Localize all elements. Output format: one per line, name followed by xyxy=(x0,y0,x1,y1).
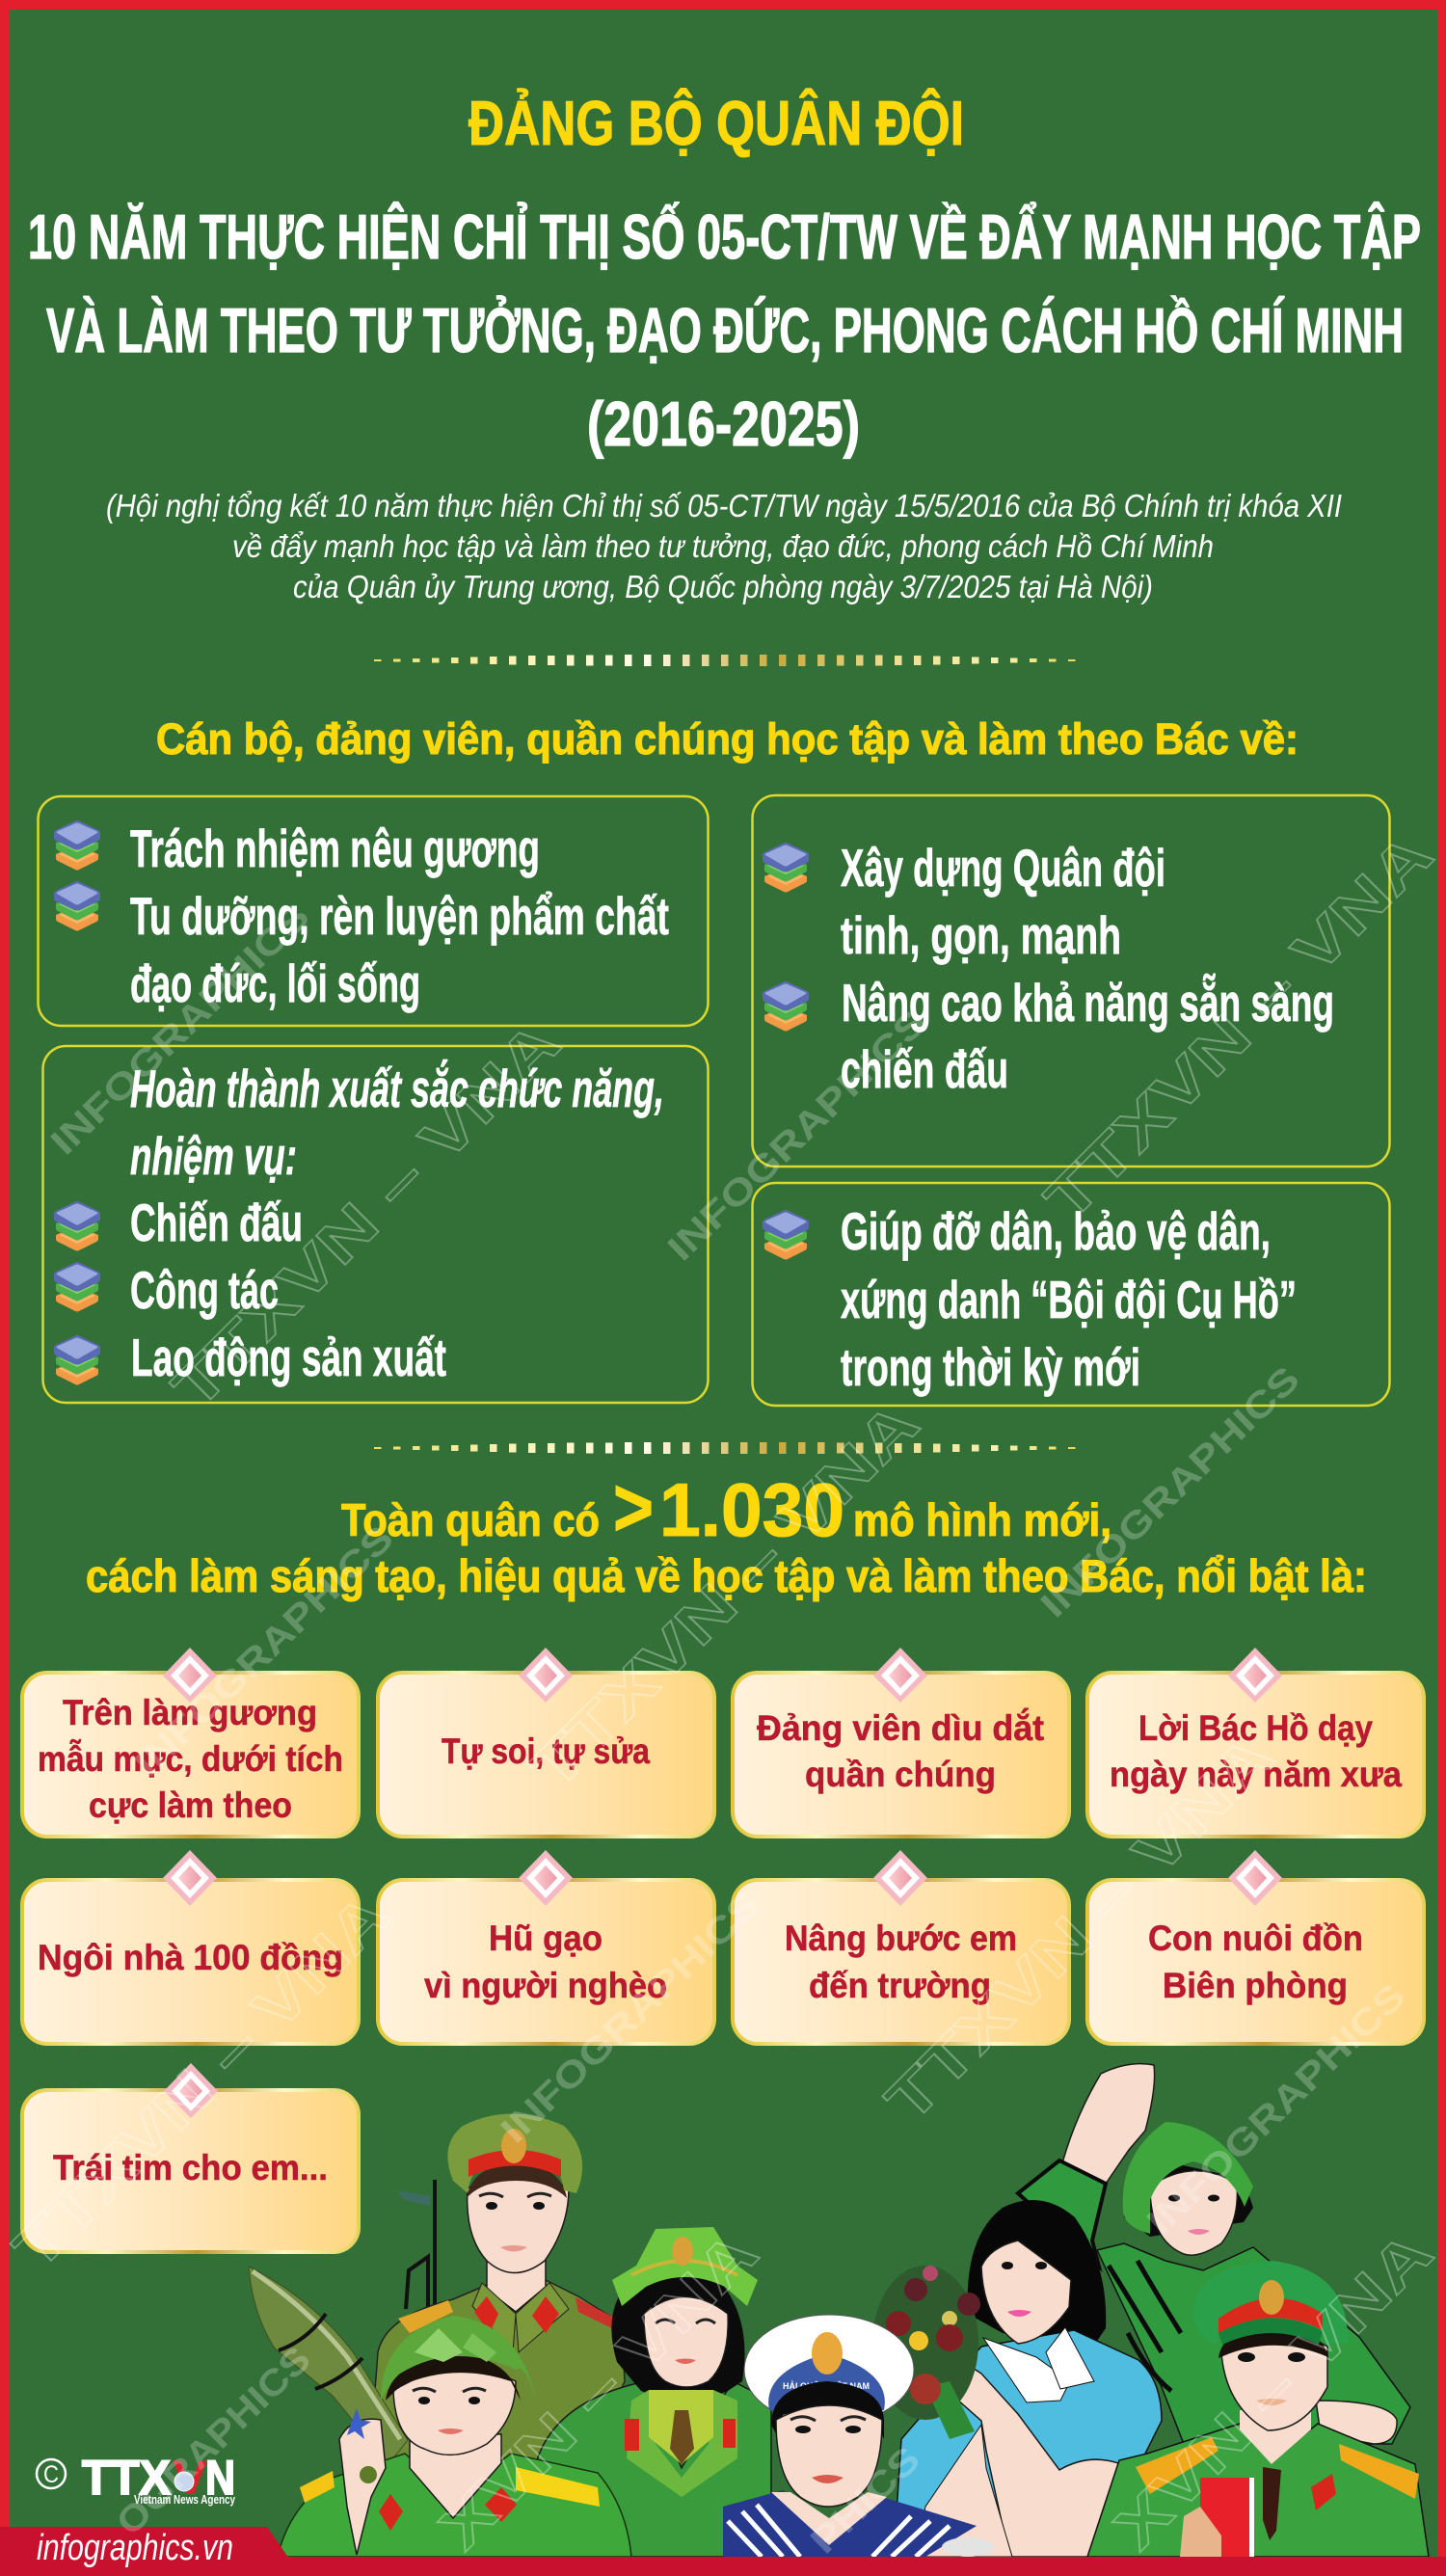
card: setting the example: Trên làm gương xyxy=(63,1693,317,1732)
panel: fulfil functions and tasks: Hoàn thành xuất sắc chức năng, xyxy=(130,1059,664,1118)
watermarks xyxy=(1,820,1446,2563)
panel: fulfil functions and tasks: nhiệm vụ: xyxy=(130,1126,297,1186)
card: 100 dong house: Ngôi nhà 100 đồng xyxy=(38,1938,343,1977)
main headline xyxy=(28,201,1421,459)
panel: fulfil functions and tasks: Lao động sản xuất xyxy=(131,1328,446,1387)
subtitle note: của Quân ủy Trung ương, Bộ Quốc phòng ngày 3/7/2025 tại Hà Nội) xyxy=(293,569,1153,604)
title: party committee: ĐẢNG BỘ QUÂN ĐỘI xyxy=(469,88,964,158)
logo: TTXVN copyright: C xyxy=(43,2461,59,2488)
watermarks: XVN – VNA xyxy=(1102,2219,1445,2563)
section heading: 1,030 new models: 1.030 xyxy=(659,1467,844,1552)
watermarks: TTXVN – VNA xyxy=(1,1881,403,2283)
panel: fulfil functions and tasks xyxy=(42,1046,708,1403)
panel: responsibility and ethics: đạo đức, lối sống xyxy=(130,953,420,1013)
watermarks: OGRAPHICS xyxy=(109,2339,319,2543)
card: self-examination: Tự soi, tự sửa xyxy=(442,1731,650,1771)
card: setting the example: cực làm theo xyxy=(89,1785,292,1825)
icon: rocket launcher xyxy=(249,2267,408,2464)
figure: woman in blue shirt with bouquet xyxy=(894,2200,1162,2557)
watermarks: TTXVN – VNA xyxy=(1032,820,1446,1234)
watermarks: TTXVN – VNA xyxy=(160,1008,574,1422)
watermarks: INFOGRAPHICS xyxy=(660,1003,935,1269)
figure: officer with rifle xyxy=(369,2113,625,2464)
card: uncle Ho's teaching: ngày này năm xưa xyxy=(1110,1755,1402,1794)
card: rice jar for the poor: vì người nghèo xyxy=(424,1966,667,2005)
card: helping children to school xyxy=(733,1850,1069,2044)
card: heart for children xyxy=(22,2063,359,2252)
illustration: group of soldiers xyxy=(249,2064,1429,2557)
card: setting the example: mẫu mực, dưới tích xyxy=(38,1739,343,1779)
logo: TTXVN copyright xyxy=(37,2451,236,2507)
panel: building the army xyxy=(752,795,1390,1167)
logo: TTXVN copyright: V xyxy=(173,2451,208,2505)
watermarks: INFOGRAPHICS xyxy=(1139,1976,1414,2242)
card: rice jar for the poor xyxy=(378,1850,714,2044)
subtitle note xyxy=(106,488,1342,604)
subtitle note: về đẩy mạnh học tập và làm theo tư tưởng, đạo đức, phong cách Hồ Chí Minh xyxy=(232,528,1214,564)
card: party members guide the masses: Đảng viên dìu dắt xyxy=(757,1707,1044,1748)
panel: helping the people xyxy=(752,1183,1390,1406)
card: helping children to school: đến trường xyxy=(809,1966,991,2005)
panel: building the army: chiến đấu xyxy=(841,1039,1008,1099)
watermarks: INFOGRAPHICS xyxy=(127,1518,402,1784)
panel: fulfil functions and tasks: Công tác xyxy=(130,1260,279,1320)
panel: responsibility and ethics: Trách nhiệm nêu gương xyxy=(130,818,540,878)
figure: woman officer in light green cap xyxy=(536,2227,771,2557)
watermarks: INFOGRAPHICS xyxy=(1033,1359,1308,1625)
footer ribbon with site name: infographics.vn xyxy=(37,2528,233,2568)
card: border post foster children: Biên phòng xyxy=(1163,1966,1348,2005)
watermarks: INFOGRAPHICS xyxy=(43,897,318,1163)
card: border post foster children: Con nuôi đồn xyxy=(1148,1919,1363,1958)
watermarks: XVN – VNA xyxy=(427,2219,770,2563)
card: party members guide the masses: quần chúng xyxy=(805,1755,996,1794)
panel: building the army: Xây dựng Quân đội xyxy=(841,838,1165,898)
figure: officer holding red book xyxy=(1087,2261,1429,2557)
card: uncle Ho's teaching: Lời Bác Hồ dạy xyxy=(1138,1708,1373,1748)
section heading: what cadres learn: Cán bộ, đảng viên, quần chúng học tập và làm theo Bác về: xyxy=(156,714,1299,764)
section heading: 1,030 new models: > xyxy=(613,1462,654,1554)
logo: TTXVN copyright: TTX xyxy=(82,2451,171,2505)
card: party members guide the masses xyxy=(733,1648,1069,1837)
figure: woman soldier raising hand xyxy=(1018,2064,1410,2444)
logo: TTXVN copyright: N xyxy=(205,2451,235,2505)
card: helping children to school: Nâng bước em xyxy=(785,1919,1017,1958)
card: rice jar for the poor: Hũ gạo xyxy=(489,1919,602,1958)
section heading: 1,030 new models: mô hình mới, xyxy=(853,1494,1111,1545)
panel: helping the people: trong thời kỳ mới xyxy=(841,1337,1140,1397)
watermarks: TTXVN – VNA xyxy=(519,1389,932,1803)
figure: navy sailor xyxy=(723,2315,994,2557)
watermarks: PHICS xyxy=(803,2439,928,2562)
logo: TTXVN copyright: Vietnam News Agency xyxy=(134,2492,236,2507)
main headline: (2016-2025) xyxy=(587,389,860,459)
card: heart for children: Trái tim cho em... xyxy=(53,2148,328,2187)
watermarks: TTXVN – VNA xyxy=(873,1722,1287,2135)
section heading: 1,030 new models: Toàn quân có xyxy=(341,1494,600,1545)
panel: responsibility and ethics: Tu dưỡng, rèn luyện phẩm chất xyxy=(130,886,669,946)
icon: flower bouquet xyxy=(872,2266,980,2439)
section heading: 1,030 new models xyxy=(86,1462,1367,1601)
panel: building the army: tinh, gọn, mạnh xyxy=(841,905,1121,965)
watermarks: INFOGRAPHICS xyxy=(494,1885,768,2151)
panel: responsibility and ethics xyxy=(39,796,708,1026)
panel: fulfil functions and tasks: Chiến đấu xyxy=(130,1193,303,1252)
card: setting the example xyxy=(22,1648,359,1837)
card: uncle Ho's teaching xyxy=(1087,1648,1424,1837)
figure: navy sailor: HẢI QUÂN VIỆT NAM xyxy=(783,2380,870,2391)
card: self-examination xyxy=(378,1648,714,1837)
card: 100 dong house xyxy=(22,1850,359,2044)
figure: helmeted soldier with rocket xyxy=(278,2316,631,2557)
card: border post foster children xyxy=(1087,1850,1424,2044)
